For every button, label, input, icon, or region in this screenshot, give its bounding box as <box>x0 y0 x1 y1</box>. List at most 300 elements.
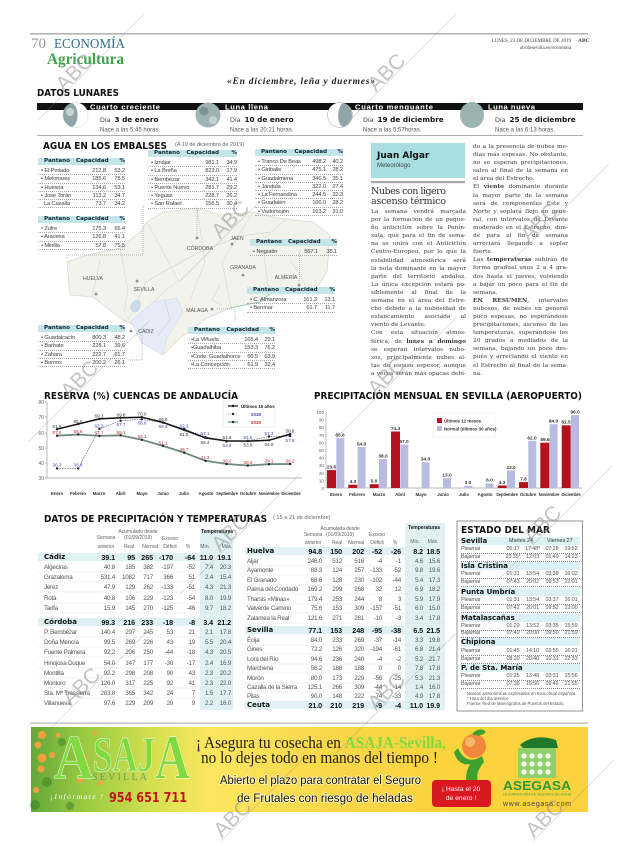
table: Huelva, Sevilla y Ceuta headers: % <box>393 540 397 546</box>
table: embalses Jaén: Pantano <box>261 149 287 155</box>
article: column two: EN RESUMEN, intervalos <box>473 298 568 304</box>
text: 298 <box>125 670 135 677</box>
table: tides: Bajamar <box>461 605 480 611</box>
article: column one: semana en el área del Estre- <box>371 298 466 304</box>
table: embalses Málaga-Granada: 156.5 <box>205 201 219 207</box>
text: 9.7 <box>205 605 213 612</box>
table: tides: 13:54 <box>526 597 539 603</box>
article: column two: moderado en el Estrecho, don- <box>473 225 568 231</box>
moon phases strip: Cuarto menguante <box>355 102 433 112</box>
text: 17.9 <box>429 596 440 603</box>
article: column two: poco espesas, no esperándose <box>473 314 568 320</box>
table: embalses Cádiz: • Bornos <box>41 360 62 366</box>
table: embalses Córdoba: • Melonares <box>41 176 70 182</box>
table: tides: 03:35 <box>545 623 558 629</box>
text: Doña Mencía <box>44 639 79 646</box>
text: 717 <box>143 574 153 581</box>
table: embalse Negratín: Pantano <box>256 239 282 245</box>
line chart: reserva cuencas: 39.2 <box>223 458 232 464</box>
table: tides: 14:23 <box>564 554 578 560</box>
panel: estado del mar frame <box>457 521 582 711</box>
map of Andalucía: GRANADA <box>230 265 256 271</box>
table: embalses Jaén: Capacidad <box>294 149 327 155</box>
table: tides: 07:42 <box>506 605 520 611</box>
text: 124 <box>332 567 342 574</box>
line chart: reserva cuencas: Septiembre <box>216 491 239 496</box>
table: Cádiz y Córdoba headers: Déficit <box>163 544 177 550</box>
table: embalses Málaga: Capacidad <box>226 327 259 333</box>
text: -2 <box>396 656 401 663</box>
table: embalses Málaga: 165.4 <box>244 337 258 343</box>
text: 6.0 <box>415 605 423 612</box>
table: tides: Martes 24 <box>509 538 533 544</box>
text: 6.8 <box>415 646 423 653</box>
table: tides: 09:50 <box>545 630 558 636</box>
table: embalses Málaga-Granada: 41.4 <box>226 177 237 183</box>
text: -4 <box>395 701 401 710</box>
line chart: reserva cuencas: 69.8 <box>117 412 126 418</box>
table: embalses Almería: 11.7 <box>325 305 335 311</box>
table: embalses Almería: Pantano <box>253 287 279 293</box>
banner: insurance text <box>220 773 421 805</box>
text: 21.0 <box>308 701 322 710</box>
table: embalses Málaga-Granada: 981.1 <box>205 160 219 166</box>
table: embalses Málaga-Granada: • Bembézar <box>151 177 180 183</box>
text: 95 <box>127 553 135 562</box>
text: -52 <box>393 567 401 574</box>
text: 126 <box>332 646 342 653</box>
table: embalses Córdoba: La Cazalla <box>44 201 70 207</box>
table: embalses Málaga: 76.2 <box>264 345 275 351</box>
heading: datos lunares: DATOS LUNARES <box>37 88 119 99</box>
text: 512 <box>332 558 342 565</box>
table: tides: Mareas astronómicas expresadas en hora oficial española. <box>467 691 576 696</box>
line chart: reserva cuencas: 57.8 <box>53 430 62 435</box>
article: column two: el Estrecho al final de la sema- <box>473 363 568 369</box>
table: Cádiz y Córdoba headers: (01/09/2019) <box>124 535 152 541</box>
table: tides: Bajamar <box>461 656 480 662</box>
table: embalse Negratín: • Negratín <box>253 249 277 255</box>
table: embalses Málaga-Granada: 26.2 <box>226 193 237 199</box>
bar chart: precipitación: Octubre <box>520 492 537 497</box>
table: embalse Negratín: % <box>331 239 337 245</box>
table: Cádiz y Córdoba headers: Semana <box>97 535 115 541</box>
text: -8 <box>189 618 195 627</box>
bar chart: precipitación: 96.0 <box>570 410 580 416</box>
line chart: reserva cuencas: 54.5 <box>244 435 253 440</box>
text: 266 <box>332 684 342 691</box>
text: ABC <box>519 501 566 548</box>
table: embalses Jaén: 244.5 <box>312 192 326 198</box>
heading: line chart: RESERVA (%) CUENCAS DE ANDALUCÍA <box>44 389 238 402</box>
moon: luna nueva <box>460 102 484 128</box>
banner: slogan: no lo dejes todo en manos del tiempo ! <box>201 748 438 767</box>
subsection heading: Agricultura <box>47 51 124 68</box>
table: embalses Cádiz: 200.2 <box>92 360 106 366</box>
text: 516 <box>354 558 364 565</box>
table: tides: 01:31 <box>506 571 520 577</box>
text: 1.4 <box>415 684 423 691</box>
line chart: reserva cuencas: 46.7 <box>180 447 189 452</box>
text: 17.8 <box>429 665 440 672</box>
text: ( 15 a 21 de diciembre) <box>273 515 331 521</box>
legend: line chart <box>223 401 275 427</box>
article: column one: siblemente al final de la <box>371 290 466 296</box>
text: 2.3 <box>205 680 213 687</box>
text: Tarifa <box>44 605 58 612</box>
table: Cádiz y Córdoba headers: Temperaturas <box>201 529 233 535</box>
table: tides: P. de Sta. María <box>461 664 523 672</box>
table: embalses Huelva: • Minilla <box>41 243 60 249</box>
text: 216 <box>123 618 135 627</box>
text: -194 <box>370 646 382 653</box>
table: tides: 16:21 <box>564 648 578 654</box>
table: embalses Málaga: •La Concepción <box>191 362 230 368</box>
table: tides: 21:59 <box>564 630 578 636</box>
article: column two: dias más espesas. No obstante, <box>473 152 568 158</box>
table: tides: 23:35* <box>505 554 520 560</box>
table: tides: 01:31 <box>506 597 520 603</box>
text: 6.9 <box>415 586 423 593</box>
bar chart: precipitación: 59.6 <box>540 437 550 443</box>
text: 270 <box>143 605 153 612</box>
bar chart: precipitación: Marzo <box>373 492 386 497</box>
table: embalse Negratín: Capacidad <box>288 239 321 245</box>
bar chart: precipitación: 70 <box>319 433 324 438</box>
text: -9 <box>376 701 382 710</box>
table: embalses Jaén: 31.0 <box>332 209 343 215</box>
banner: phone: 954 651 711 <box>109 791 187 806</box>
text: ABC <box>207 196 254 243</box>
table: embalses Jaén <box>255 149 343 216</box>
text: 269 <box>354 637 364 644</box>
table: Cádiz y Córdoba headers: Exceso <box>162 536 178 542</box>
bar chart: precipitación: 6.0 <box>486 478 493 484</box>
line chart: reserva cuencas: 57.6 <box>286 438 295 443</box>
table: embalses Córdoba: 34.7 <box>114 193 125 199</box>
text: 12 <box>394 586 401 593</box>
bar chart: precipitación: 10 <box>319 478 324 483</box>
table: Cádiz y Córdoba headers: % <box>186 544 190 550</box>
text: 0 <box>379 665 382 672</box>
table: tides: 13:48 <box>526 673 539 679</box>
text: -26 <box>391 547 401 556</box>
text: -64 <box>185 553 195 562</box>
text: 257 <box>354 567 364 574</box>
table: embalses Córdoba: • Jose Torán <box>41 193 71 199</box>
line chart: reserva cuencas: 62.3 <box>95 424 104 428</box>
line chart: reserva cuencas: 39.1 <box>265 458 274 464</box>
map of Andalucía: ALMERÍA <box>275 274 298 281</box>
legend: bar chart: Normal (últimos 30 años) <box>444 426 497 432</box>
moon phases strip: Día 19 de diciembre <box>363 115 444 124</box>
text: 297 <box>125 629 135 636</box>
table: embalses Jaén: • Vadomojón <box>258 209 289 215</box>
article: column two: temperaturas, superándose los <box>473 330 568 336</box>
bar chart: precipitación: 7.8 <box>520 476 527 482</box>
table: tides: 01:45 <box>506 648 520 654</box>
table: Cádiz y Córdoba headers: Normal <box>142 544 158 550</box>
text: 92 <box>166 680 173 687</box>
text: 173 <box>332 675 342 682</box>
text: Gines <box>247 646 262 653</box>
banner: insurance text: Abierto el plazo para contratar el Seguro <box>220 773 421 787</box>
text: ABC <box>521 795 568 842</box>
line chart: reserva cuencas: Abril <box>116 491 125 496</box>
text: 94.6 <box>311 656 322 663</box>
text: Rota <box>44 595 56 602</box>
article: column one: parte del territorio andaluz. <box>371 274 466 280</box>
text: 3 <box>398 596 401 603</box>
table: embalses Córdoba: 113.2 <box>93 193 106 199</box>
article: column two: forma gradual unos 2 a 4 gra- <box>473 265 568 271</box>
text: 20.5 <box>220 649 231 656</box>
article headline: Nubes con ligero <box>371 186 446 197</box>
table: tides: 19:56 <box>526 681 539 687</box>
table: embalses Córdoba <box>38 158 125 208</box>
bar chart: precipitación: 23.0 <box>506 465 516 471</box>
bar chart: precipitación: 62.0 <box>527 436 537 442</box>
text: 39.1 <box>101 553 115 562</box>
moon phases strip: Nace a las 6:13 horas. <box>495 128 555 134</box>
table: embalses Málaga: 63.9 <box>264 354 275 360</box>
table: embalses Cádiz: 39.6 <box>114 343 125 349</box>
temperature column shading <box>38 523 445 710</box>
text: 246.0 <box>307 558 322 565</box>
text: -17 <box>187 660 195 667</box>
table: tides: 20:01 <box>526 605 539 611</box>
text: 18.2 <box>429 586 440 593</box>
text: 2.1 <box>205 629 213 636</box>
map of Andalucía: HUELVA <box>83 276 104 282</box>
text: -133 <box>161 584 173 591</box>
text: 2.4 <box>205 660 213 667</box>
text: -25 <box>393 675 401 682</box>
text: 17.8 <box>220 629 231 636</box>
text: -133 <box>370 567 382 574</box>
table: tides: 17:48* <box>525 546 540 552</box>
line chart: reserva cuencas: 57.7 <box>95 430 104 436</box>
text: 265 <box>141 553 153 562</box>
text: El Granado <box>247 577 276 584</box>
text: 15.6 <box>429 558 440 565</box>
text: 188 <box>354 665 364 672</box>
legend: line chart: 2019 <box>251 420 261 425</box>
text: 21.7 <box>429 656 440 663</box>
table: embalses Jaén: 27.4 <box>332 184 343 190</box>
table: tides: 22:33 <box>564 656 578 662</box>
table: tides: 16:02 <box>564 571 578 577</box>
bar chart: precipitación: Febrero <box>349 492 365 497</box>
table: Huelva, Sevilla y Ceuta headers: Acumulada desde <box>320 526 360 532</box>
bar chart: precipitación: 3.0 <box>465 480 472 486</box>
table: embalses Jaén: % <box>337 149 343 155</box>
text: 106 <box>125 595 135 602</box>
text: 250 <box>143 649 153 656</box>
legend: bar chart: Últimos 12 meses <box>444 418 482 424</box>
text: 51 <box>188 574 195 581</box>
text: 20 <box>166 700 173 707</box>
text: 145 <box>125 605 135 612</box>
table: tides: Pleamar <box>461 623 480 629</box>
text: 88.3 <box>311 567 322 574</box>
article: column two: semana, bajando un poco des- <box>473 346 568 352</box>
map of Andalucía <box>67 205 330 360</box>
line chart: reserva cuencas: 66.3 <box>159 424 168 429</box>
text: 179.4 <box>307 596 322 603</box>
bar chart: precipitación: 80 <box>319 425 324 430</box>
text: 17.7 <box>220 690 231 697</box>
banner: ASAJA logo: A <box>54 724 94 792</box>
article: column two: arreciará llegando a soplar <box>473 241 568 247</box>
table: tides: Pleamar <box>461 673 480 679</box>
text: 24 <box>166 690 173 697</box>
table: embalses Cádiz: 800.3 <box>92 335 106 341</box>
table: embalses Jaén: • Giribaile <box>258 167 281 173</box>
text: 40.8 <box>104 564 115 571</box>
table: embalses Málaga-Granada: 281.7 <box>205 185 219 191</box>
text: 320 <box>354 646 364 653</box>
banner: deadline badge: ¡ Hasta el 20 <box>442 786 480 793</box>
table: embalses Málaga-Granada: • Yeguas <box>151 193 172 199</box>
table: embalses Huelva: 126.8 <box>92 234 106 240</box>
article: column two: precipitaciones, ascenso de las <box>473 322 568 328</box>
table: embalses Jaén: 166.0 <box>312 200 326 206</box>
table: embalses Huelva <box>38 216 125 250</box>
text: 11.0 <box>410 701 423 710</box>
line chart: reserva cuencas: 70.0 <box>138 412 147 416</box>
table: embalses Málaga: Pantano <box>194 327 220 333</box>
table: tides: 13:54 <box>526 571 539 577</box>
article: column one: La única excepción estará po- <box>371 282 466 288</box>
line chart: reserva cuencas: 39.2 <box>286 458 295 464</box>
table: embalses Huelva: 41.1 <box>114 234 125 240</box>
table: tides: Matalascañas <box>461 614 515 622</box>
text: -33 <box>393 693 401 700</box>
table: tides: Bajamar <box>461 630 480 636</box>
bar chart: precipitación: Noviembre <box>539 492 560 497</box>
table: tides: 03:38 <box>545 571 558 577</box>
table: Cádiz y Córdoba headers: Real <box>124 544 134 550</box>
text: 121.6 <box>307 615 322 622</box>
text: 148 <box>332 693 342 700</box>
map of Andalucía: JAÉN <box>230 235 244 242</box>
table: embalses Cádiz: • Guadalcacín <box>41 335 75 341</box>
text: -14 <box>393 684 401 691</box>
line chart: reserva cuencas: 57.3 <box>265 431 274 436</box>
text: 56.2 <box>311 665 322 672</box>
map of Andalucía: MÁLAGA <box>186 307 208 314</box>
table: tides: * Hora del día anterior. <box>467 696 509 701</box>
text: 129 <box>125 584 135 591</box>
table: embalses Cádiz: 26.1 <box>114 360 125 366</box>
date note: (A 19 de diciembre de 2019) <box>175 142 244 148</box>
line chart: reserva cuencas: Octubre <box>240 491 257 496</box>
table: embalses Huelva: 57.8 <box>95 243 106 249</box>
moon phases strip: Nace a las 5:57horas. <box>363 128 422 134</box>
text: 208 <box>143 670 153 677</box>
text: 236 <box>332 656 342 663</box>
text: 8.0 <box>205 595 213 602</box>
table: embalses Málaga: 61.9 <box>247 362 258 368</box>
table: embalses Huelva: 175.3 <box>92 226 106 232</box>
article: column two: El viento dominante durante <box>473 184 568 190</box>
text: Palma del Condado <box>247 586 298 593</box>
article: column two: a bajar un poco para el fin de <box>473 282 568 288</box>
table: tides: 22:01 <box>564 579 578 585</box>
text: 206 <box>125 649 135 656</box>
table: embalses Almería: 161.3 <box>303 297 317 303</box>
table: embalses Huelva: Capacidad <box>76 216 109 222</box>
article: column two: el área del Estrecho. <box>473 176 534 182</box>
line chart: reserva cuencas: Febrero <box>70 491 86 496</box>
map of Andalucía: CÁDIZ <box>138 328 154 335</box>
text: -46 <box>187 605 195 612</box>
article headline: ascenso térmico <box>371 196 446 207</box>
legend: bar chart <box>433 413 497 437</box>
text: 84.0 <box>311 637 322 644</box>
moon phases strip: Día 25 de diciembre <box>495 115 576 124</box>
table: tides: Pleamar <box>461 597 480 603</box>
table: Cádiz y Córdoba headers: Acumulado desde <box>118 529 158 535</box>
text: Pilas <box>247 693 259 700</box>
line chart: reserva cuencas: 40 <box>38 461 44 467</box>
line chart: reserva cuencas: Noviembre <box>259 491 280 496</box>
banner: insurance text: de Frutales con riesgo de heladas <box>237 791 413 805</box>
text: Grazalema <box>44 574 73 581</box>
text: Sta. Mª Trassierra <box>44 690 90 697</box>
bar chart: precipitación: 30 <box>319 463 324 468</box>
table: embalses Málaga <box>188 327 275 369</box>
date line: abcdesevilla.es/economia <box>520 46 572 51</box>
table: embalses Almería: 61.7 <box>306 305 317 311</box>
text: 230 <box>354 577 364 584</box>
line chart: reserva cuencas: 41.3 <box>201 455 210 460</box>
table: embalses Jaén: 35.1 <box>332 176 343 182</box>
text: -74 <box>374 693 382 700</box>
table: embalses Almería: • Benínar <box>250 305 273 311</box>
text: 209 <box>143 700 153 707</box>
article: column one: tas de escaso espesor, aunque <box>371 363 466 369</box>
table: tides: 10:31 <box>545 656 558 662</box>
text: 16.9 <box>220 660 231 667</box>
bar chart: precipitación: 84.0 <box>549 418 558 424</box>
table: embalses Córdoba: % <box>119 158 125 164</box>
text: 80.0 <box>311 675 322 682</box>
text: -125 <box>161 605 173 612</box>
table: embalses Jaén: • Tranco De Beas <box>258 159 301 165</box>
article: column one: sos, principalmente nubes al- <box>371 355 466 361</box>
table: embalses Córdoba: Pantano <box>44 158 70 164</box>
article: column two: ral, con intervalos de Levante <box>473 217 568 223</box>
table: Huelva, Sevilla y Ceuta headers: Real <box>332 540 342 546</box>
text: 3.4 <box>203 618 213 627</box>
table: Huelva, Sevilla y Ceuta headers: Temperaturas <box>408 525 440 531</box>
bar chart: precipitación: 60 <box>319 440 324 445</box>
text: -37 <box>374 637 382 644</box>
table: Huelva, Sevilla y Ceuta headers: Normal <box>348 540 364 546</box>
table: embalses Jaén: 322.0 <box>312 184 326 190</box>
text: Valverde Camino <box>247 605 291 612</box>
banner: ASAJA logo: SAJ <box>93 726 155 782</box>
table: embalses Huelva: • Aracena <box>41 234 65 240</box>
text: P. Bembézar <box>44 629 77 636</box>
table: tides: Bajamar <box>461 554 480 560</box>
bar chart: precipitación: 100 <box>316 410 324 415</box>
heading: agua en los embalses: AGUA EN LOS EMBALSES <box>43 141 167 152</box>
table: embalses Málaga-Granada: • Puente Nuevo <box>151 185 189 191</box>
bar chart: precipitación: Mayo <box>415 492 427 497</box>
